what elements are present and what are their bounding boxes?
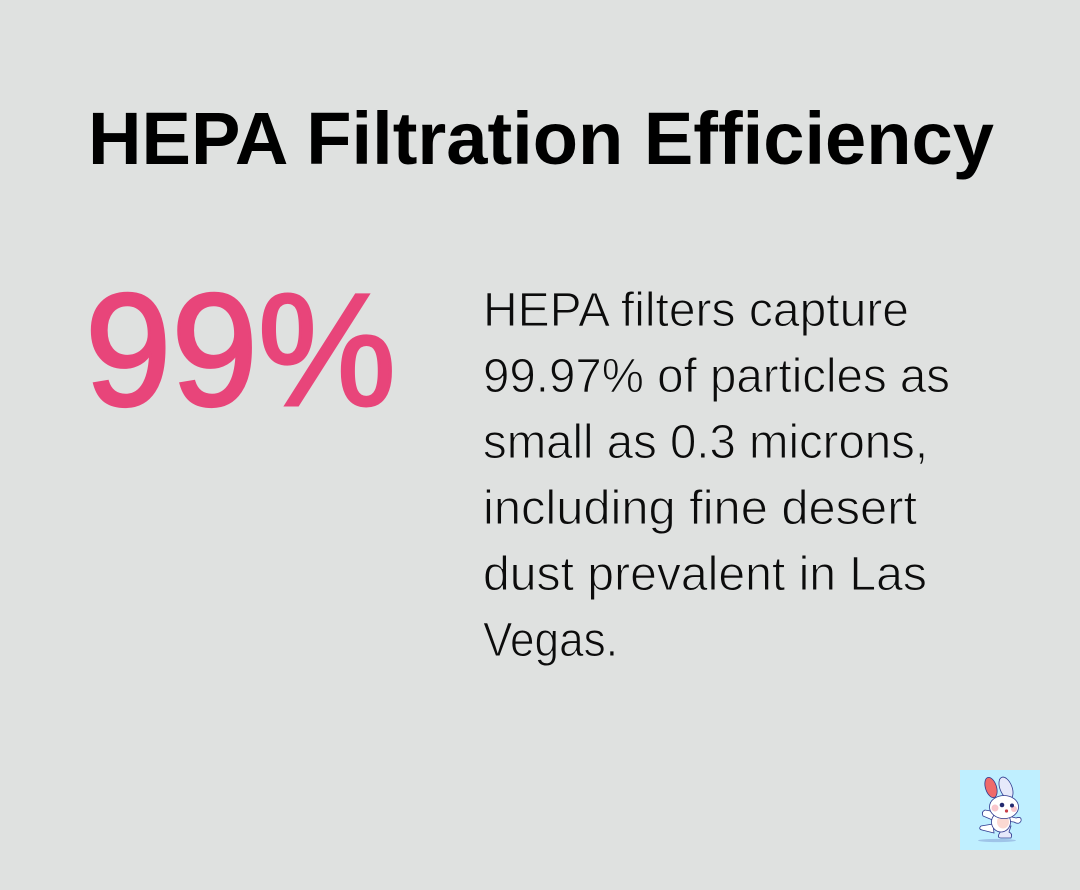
head (990, 796, 1018, 818)
description text block: including fine desert (483, 482, 917, 535)
right ear (996, 775, 1016, 801)
description text block: 99.97% of particles as (483, 350, 950, 403)
description text block: Vegas. (483, 614, 618, 667)
left ear (983, 776, 999, 799)
icon: running rabbit logo (960, 770, 1040, 850)
description text block: HEPA filters capture (483, 284, 909, 337)
description text block (483, 284, 950, 667)
title: HEPA Filtration Efficiency (88, 97, 994, 180)
description text block: dust prevalent in Las (483, 548, 927, 601)
body (992, 812, 1010, 832)
big statistic: 99%: 99% (85, 260, 396, 439)
arms and legs (982, 810, 996, 821)
description text block: small as 0.3 microns, (483, 416, 928, 469)
